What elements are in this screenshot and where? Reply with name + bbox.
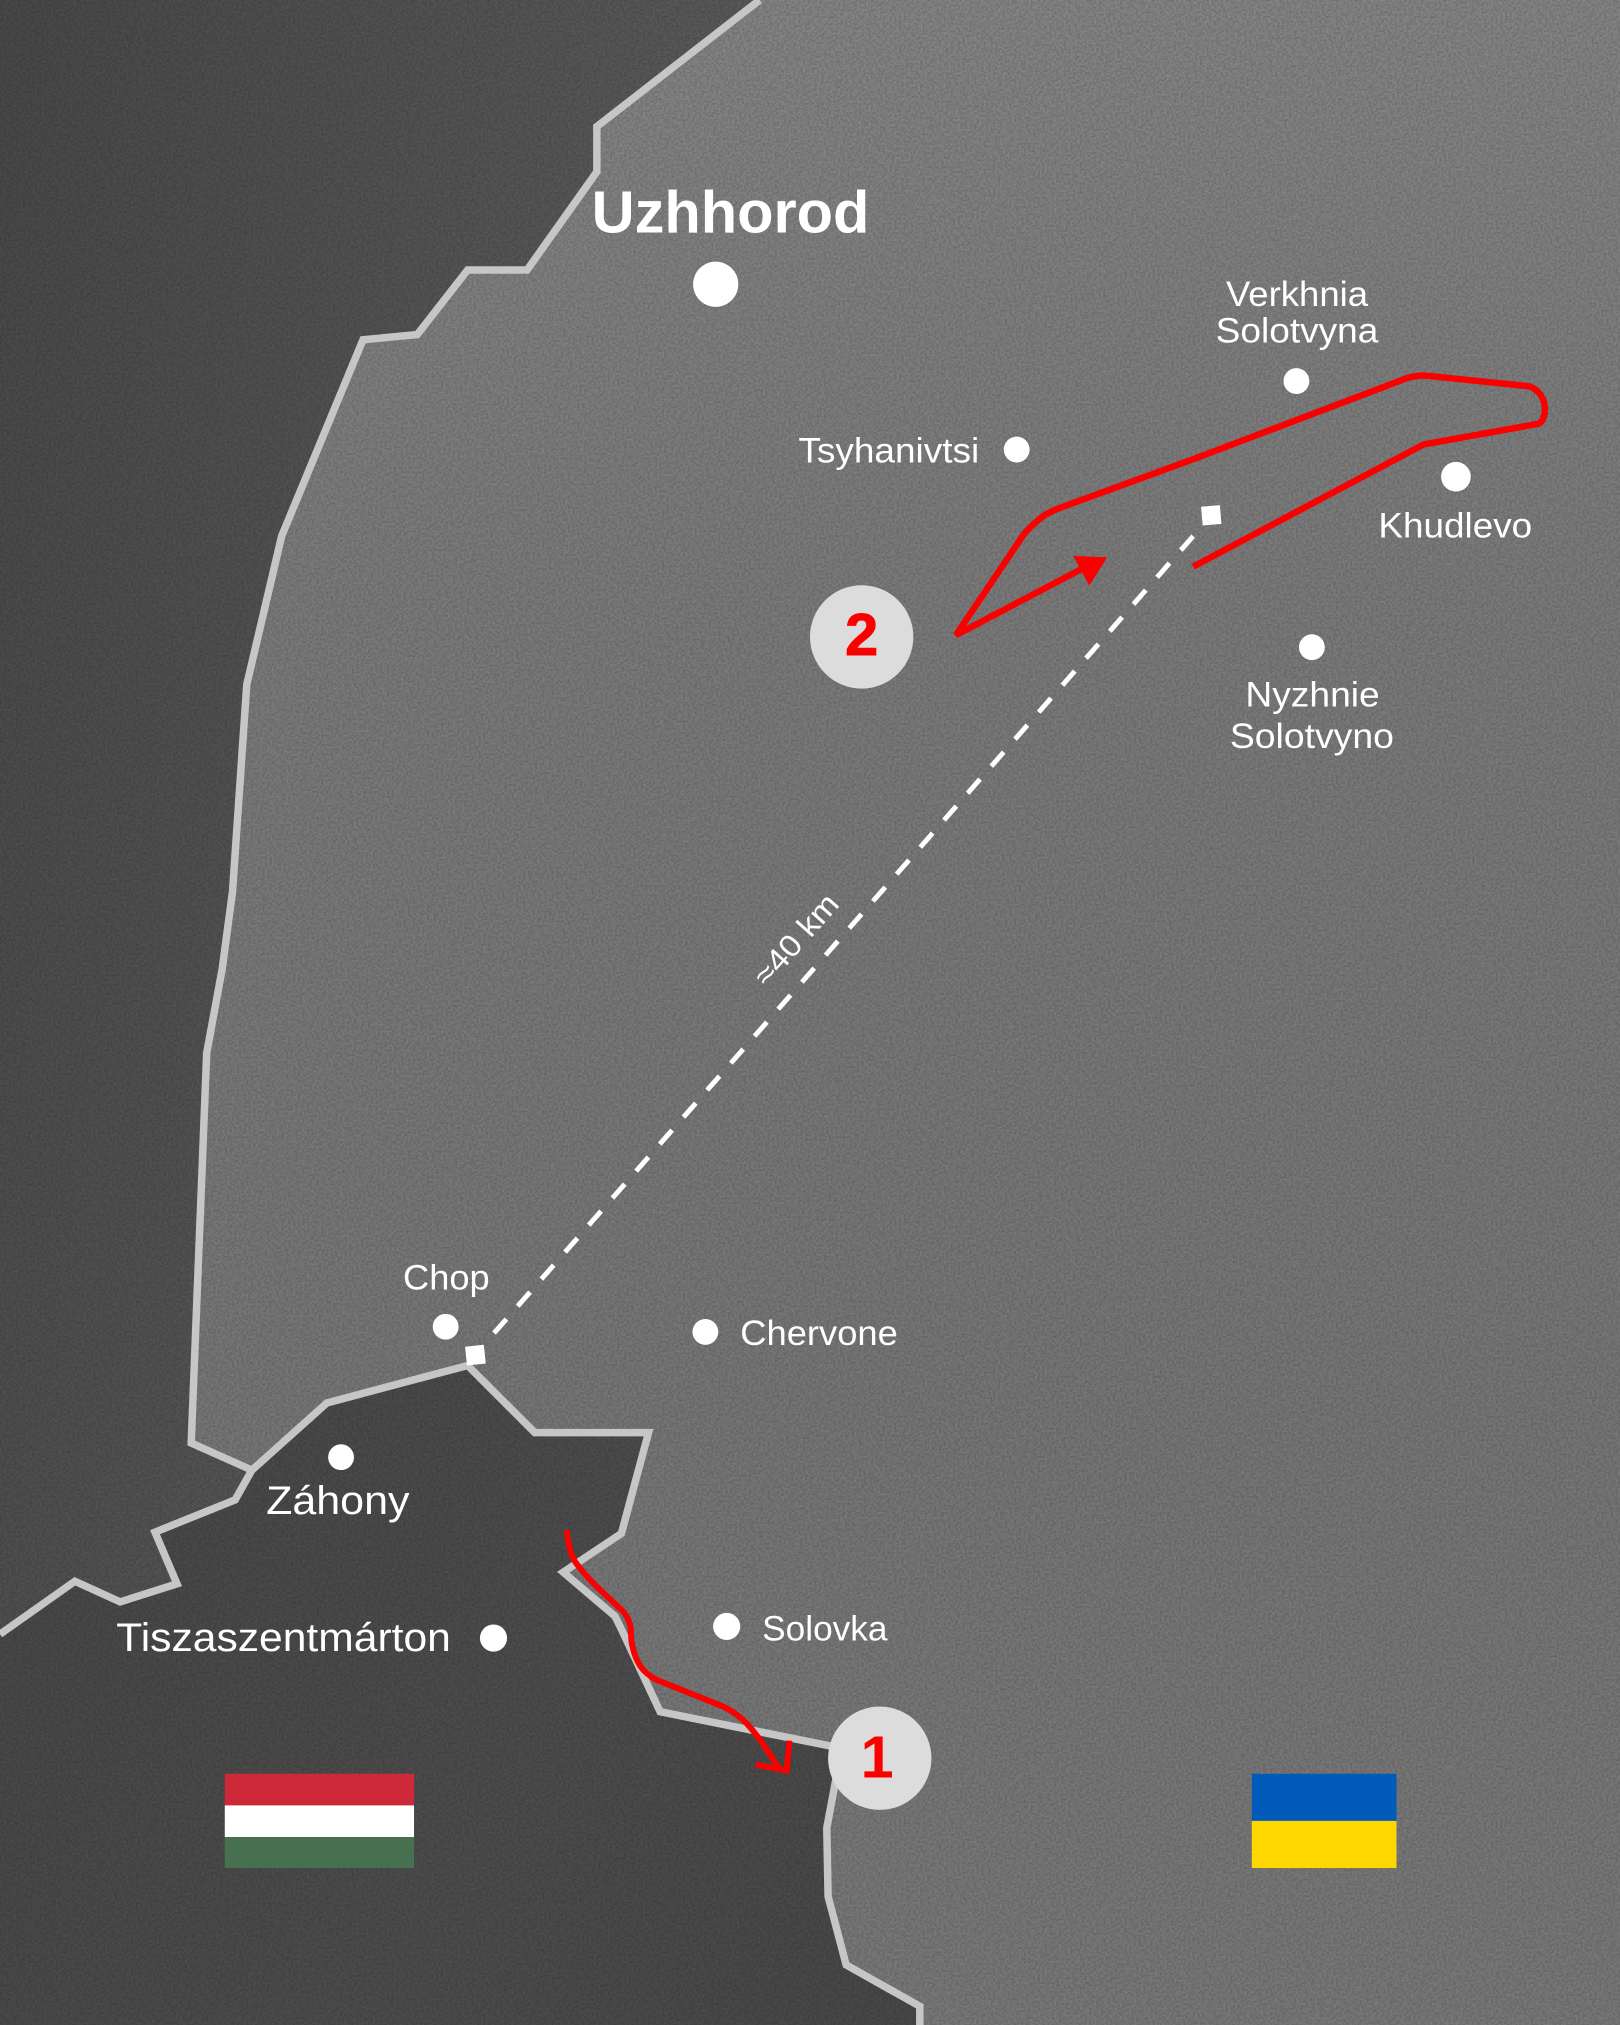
city: Uzhhorod: Uzhhorod xyxy=(592,179,869,246)
distance label: ≈40 km xyxy=(746,886,846,993)
flag: Ukraine xyxy=(1252,1774,1397,1868)
city: Záhony xyxy=(266,1444,410,1523)
endpoint marker: Chop xyxy=(465,1345,486,1366)
border: Ukraine west and south xyxy=(191,0,920,2025)
city: Chop: Chop xyxy=(403,1258,490,1297)
arrowhead route 1 xyxy=(756,1741,789,1771)
city: Chervone: Chervone xyxy=(740,1314,898,1353)
city: Nyzhnie Solotvyno: Solotvyno xyxy=(1230,717,1394,756)
city: Nyzhnie Solotvyno: Nyzhnie xyxy=(1245,676,1380,715)
city: Verkhnia Solotvyna: Solotvyna xyxy=(1216,311,1379,350)
badge 1: 1 xyxy=(861,1724,894,1791)
flag: Hungary xyxy=(225,1774,414,1868)
badge 2 xyxy=(810,585,913,689)
city: Chop xyxy=(403,1258,490,1340)
city: Uzhhorod xyxy=(592,179,869,307)
red route 1 xyxy=(567,1530,780,1770)
badge 2: 2 xyxy=(845,601,878,668)
red route 2 xyxy=(956,376,1545,635)
city: Tsyhanivtsi: Tsyhanivtsi xyxy=(798,431,979,470)
region: Hungary xyxy=(0,1366,920,2025)
city: Záhony: Záhony xyxy=(266,1479,410,1523)
city: Verkhnia Solotvyna xyxy=(1216,275,1379,394)
border: Hungary and Slovakia xyxy=(0,1470,252,1634)
city: Khudlevo: Khudlevo xyxy=(1378,506,1532,545)
endpoint marker: Solotvyno xyxy=(1201,505,1221,526)
dashed distance line xyxy=(493,536,1193,1334)
city: Nyzhnie Solotvyno xyxy=(1230,634,1394,756)
city: Tiszaszentmárton: Tiszaszentmárton xyxy=(116,1616,451,1660)
city: Khudlevo xyxy=(1378,462,1532,545)
badge 1 xyxy=(828,1707,931,1810)
city: Solovka: Solovka xyxy=(762,1610,888,1649)
arrowhead route 2 xyxy=(1073,556,1107,586)
city: Verkhnia Solotvyna: Verkhnia xyxy=(1226,275,1369,314)
